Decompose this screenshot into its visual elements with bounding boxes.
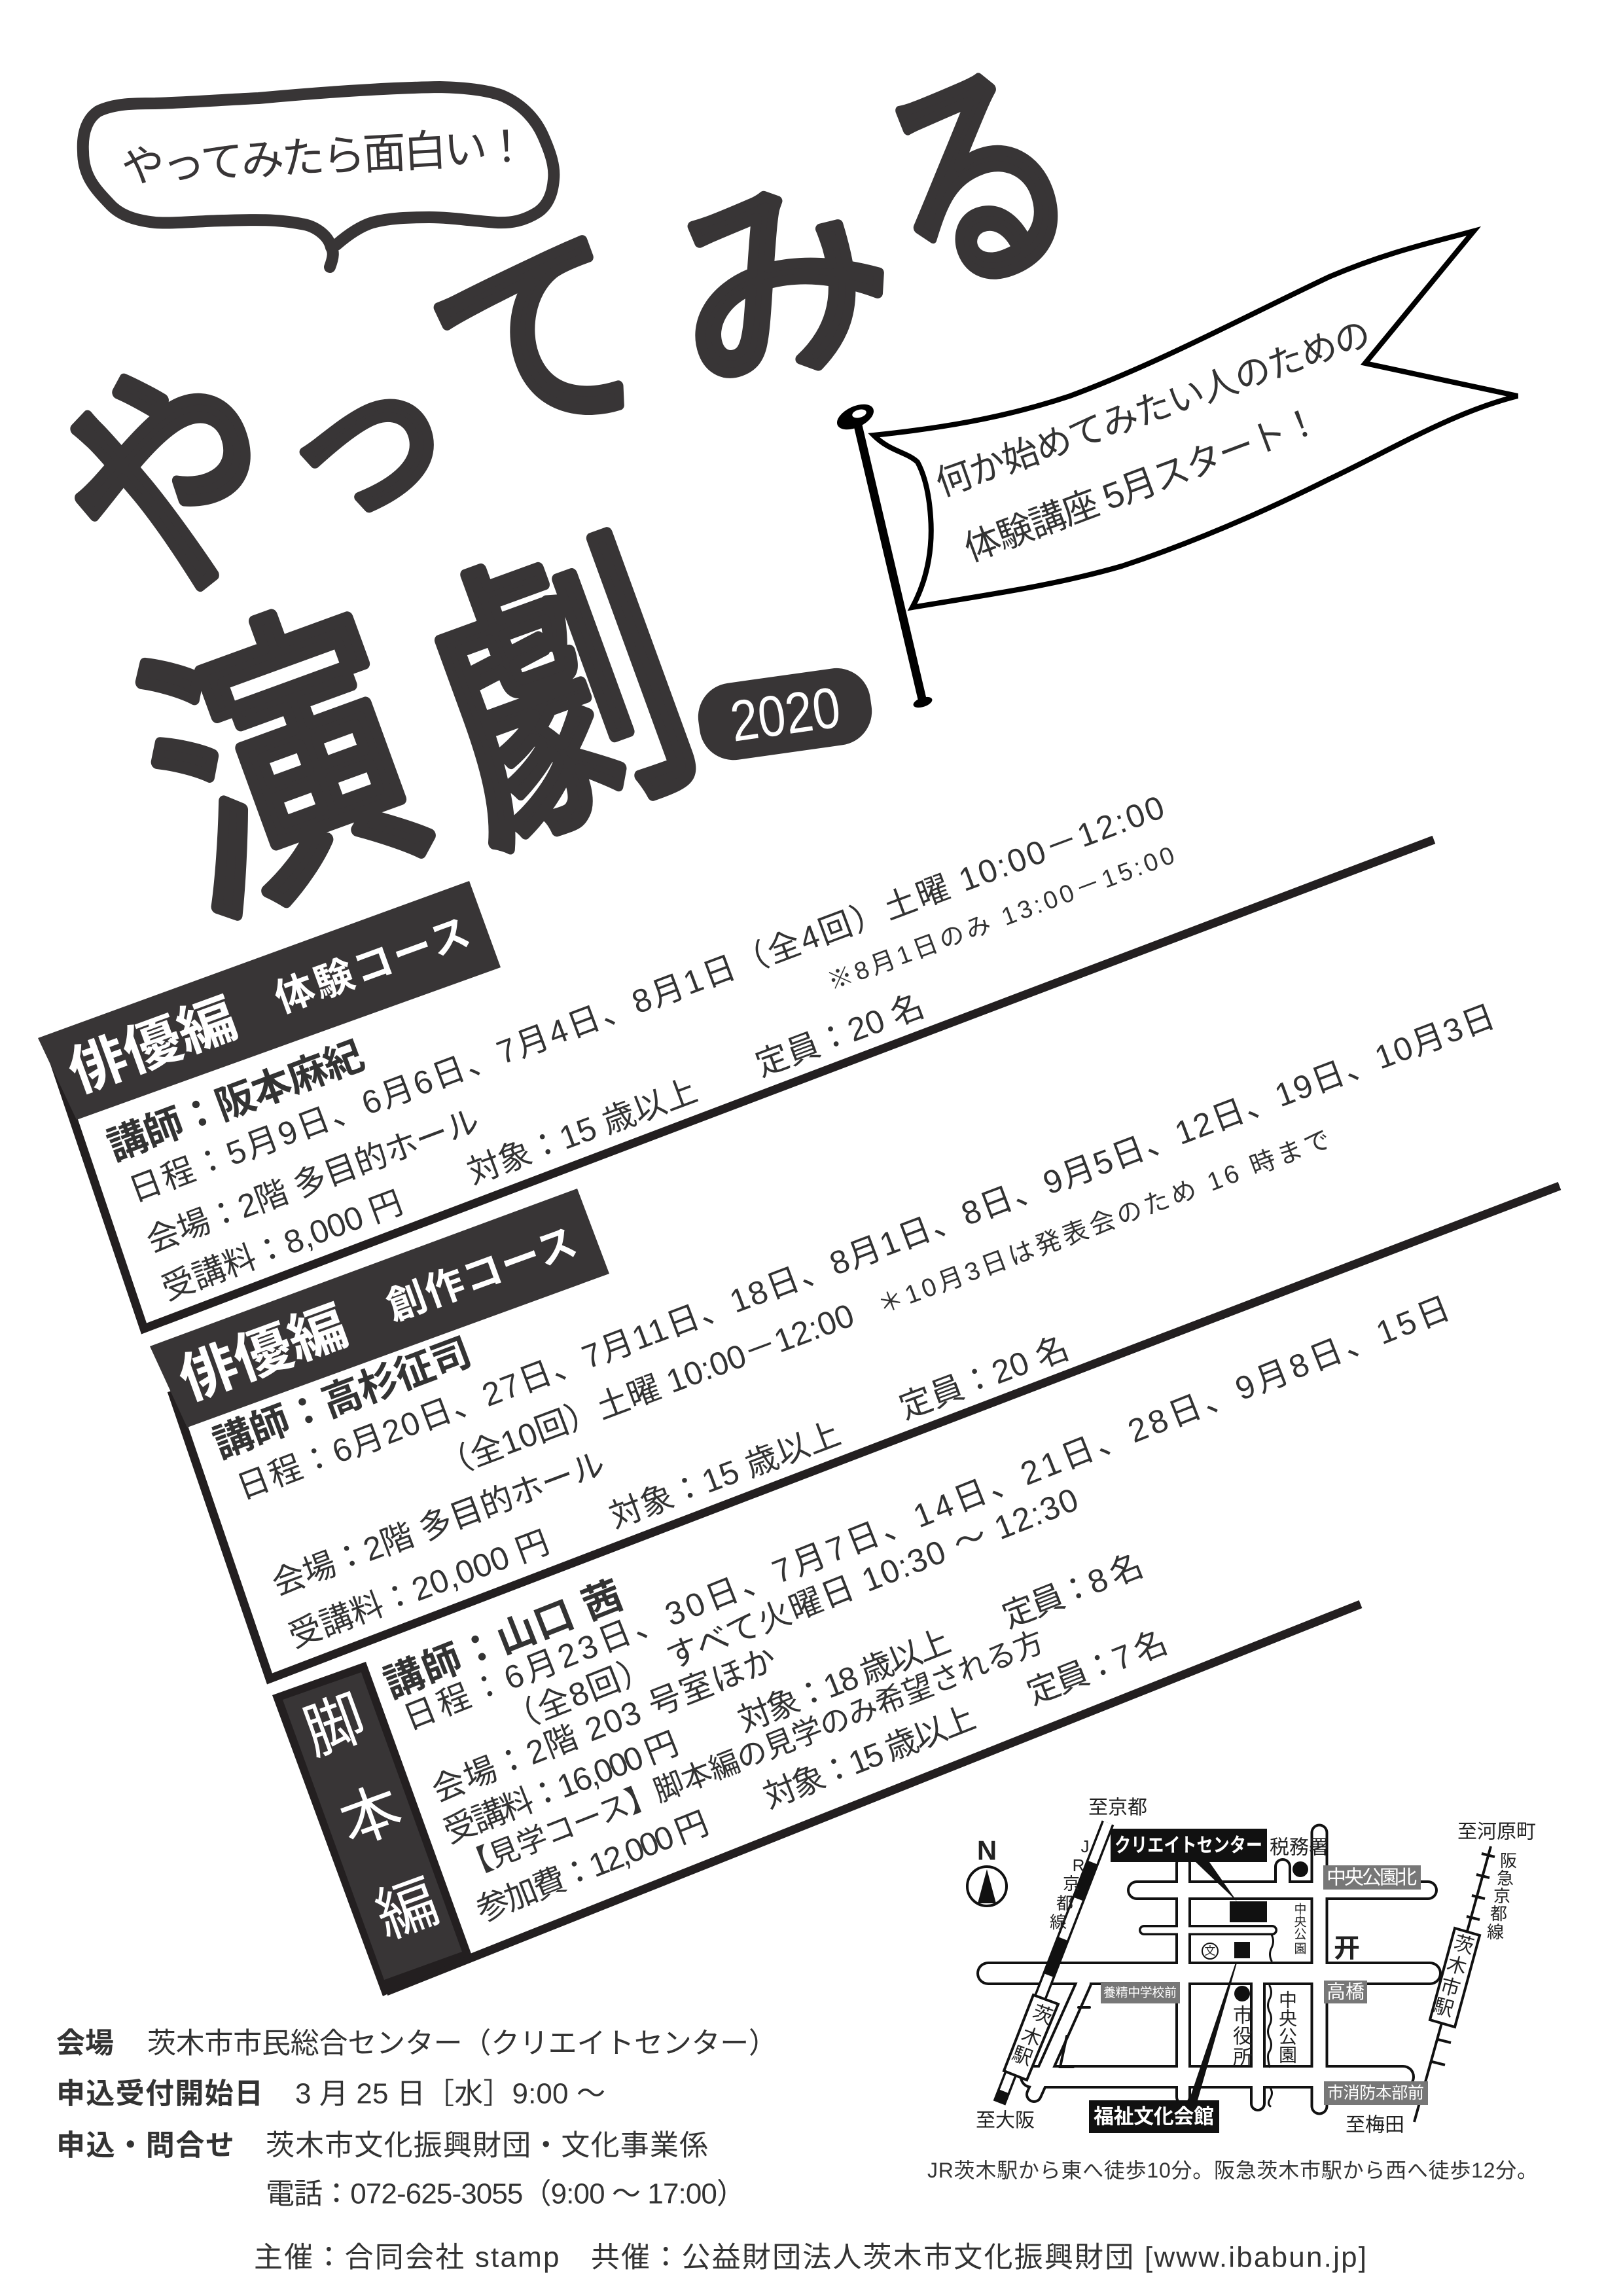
flag pole xyxy=(833,399,933,709)
vertical tab text: 編 xyxy=(367,1867,447,1951)
marker: 市役所 xyxy=(1234,1986,1250,2001)
year badge 2020: 2020 xyxy=(726,674,844,754)
target and capacity: 対象：15 歳以上 定員：20 名 xyxy=(463,987,929,1191)
label: JR京都線: J xyxy=(1081,1837,1089,1856)
label: JR京都線: R xyxy=(1073,1856,1084,1875)
bus stop: 中央公園北: 中央公園北 xyxy=(1327,1867,1417,1889)
speech bubble xyxy=(83,87,554,267)
compass xyxy=(967,1835,1007,1906)
marker: 税務署 xyxy=(1293,1861,1308,1877)
building: クリエイトセンター xyxy=(1230,1901,1267,1922)
Hankyu station box: 駅 xyxy=(1431,1995,1456,2021)
label: 市役所: 市 xyxy=(1233,2005,1253,2026)
flag xyxy=(833,231,1518,709)
vertical tab text: 脚 xyxy=(295,1684,375,1768)
instructor: 講師：高杉征司 xyxy=(207,1330,477,1466)
label: 至梅田: 至梅田 xyxy=(1346,2114,1404,2136)
label: 阪急京都線: 急 xyxy=(1497,1869,1514,1888)
panel frame xyxy=(49,840,1434,1329)
JR station box xyxy=(1004,1995,1058,2080)
observation target: 対象：15 歳以上 定員：7 名 xyxy=(758,1623,1172,1816)
instructor: 講師：山口 茜 xyxy=(378,1573,628,1706)
label: 至京都: 至京都 xyxy=(1088,1797,1147,1818)
JR station box: 駅 xyxy=(1009,2043,1035,2070)
label: 阪急京都線: 阪 xyxy=(1500,1851,1517,1871)
label: 中央公園 small: 中 xyxy=(1294,1902,1307,1916)
panel: 俳優編 体験コース xyxy=(38,789,1434,1329)
schedule line 2: （全8回） すべて火曜日 10:30 ～ 12:30 xyxy=(501,1481,1083,1739)
event information xyxy=(56,2028,777,2210)
label: 市役所: 所 xyxy=(1233,2047,1253,2068)
fee: 受講料：16,000 円 xyxy=(438,1725,683,1850)
vertical tab text xyxy=(295,1684,447,1951)
bus stop: 高橋: 高橋 xyxy=(1327,1981,1364,2003)
label: 中央公園 small xyxy=(1294,1902,1307,1956)
note: ＊10月3日は発表会のため 16 時まで xyxy=(874,1125,1334,1320)
label: JR京都線 xyxy=(1050,1837,1089,1932)
flag text line 2: 体験講座 5月スタート！ xyxy=(959,399,1325,569)
observation fee: 参加費：12,000 円 xyxy=(471,1804,713,1929)
venue: 会場：2階 203 号室ほか xyxy=(427,1640,781,1809)
schedule line 2: （全10回）土曜 10:00－12:00 xyxy=(434,1297,859,1485)
header band xyxy=(38,881,501,1120)
label: 中央公園 large: 公 xyxy=(1279,2026,1297,2047)
title: 演劇: 演 xyxy=(81,497,466,988)
application start date: 3 月 25 日［水］9:00 ～ xyxy=(295,2077,605,2110)
label: JR京都線: 線 xyxy=(1050,1912,1067,1932)
contact label: 申込・問合せ xyxy=(56,2130,234,2161)
label: 至河原町: 至河原町 xyxy=(1457,1821,1536,1843)
label: 中央公園 small: 公 xyxy=(1294,1927,1307,1941)
title: やってみる xyxy=(4,0,1116,675)
school symbol xyxy=(1202,1943,1218,1959)
target and capacity: 対象：15 歳以上 定員：20 名 xyxy=(604,1329,1074,1535)
shrine symbol: 开 xyxy=(1334,1934,1360,1963)
Hankyu line xyxy=(1414,1846,1495,2122)
target and capacity: 対象：18 歳以上 定員：8 名 xyxy=(733,1547,1148,1739)
label: 中央公園 large: 園 xyxy=(1279,2045,1297,2066)
instructor: 講師：阪本麻紀 xyxy=(101,1033,370,1169)
header title: 俳優編 xyxy=(60,987,245,1103)
label: 中央公園 large: 央 xyxy=(1279,2008,1297,2029)
header title: 俳優編 xyxy=(171,1295,355,1411)
panel frame xyxy=(386,1604,1361,1992)
header band xyxy=(150,1189,609,1427)
compass: N xyxy=(977,1835,997,1865)
JR station box: 茨 xyxy=(1029,2001,1056,2029)
Hankyu station box: 市 xyxy=(1438,1975,1463,2001)
bus stop: 養精中学校前 xyxy=(1101,1982,1180,2003)
title: やってみる: み xyxy=(615,81,929,454)
vertical tab xyxy=(272,1662,471,1996)
title: やってみる: や xyxy=(4,257,323,675)
panel frame xyxy=(171,1186,1560,1679)
title: やってみる: っ xyxy=(232,275,486,576)
observation course: 【見学コース】脚本編の見学のみ希望される方 xyxy=(457,1624,1048,1884)
fee: 受講料：8,000 円 xyxy=(156,1184,408,1307)
label: 阪急京都線: 線 xyxy=(1487,1922,1504,1942)
Hankyu station box: 木 xyxy=(1444,1953,1469,1979)
vertical tab text: 本 xyxy=(331,1774,411,1858)
header course: 体験コース xyxy=(269,910,476,1021)
label: JR京都線: 都 xyxy=(1056,1893,1073,1913)
venue: 会場：2階 多目的ホール xyxy=(141,1102,484,1259)
JR line xyxy=(999,1823,1108,2103)
label: 税務署: 税務署 xyxy=(1270,1837,1329,1859)
Hankyu station box: 茨 xyxy=(1452,1932,1476,1958)
schedule: 日程：5月9日、6月6日、7月4日、8月1日（全4回）土曜 10:00－12:00 xyxy=(124,789,1169,1209)
label: 中央公園 small: 央 xyxy=(1294,1915,1307,1929)
callout: クリエイトセンター xyxy=(1111,1829,1267,1901)
flag banner xyxy=(874,231,1518,607)
label: 至大阪: 至大阪 xyxy=(976,2110,1035,2131)
label: JR京都線: 京 xyxy=(1063,1874,1080,1893)
year badge 2020 xyxy=(694,664,876,764)
bus stop: 養精中学校前: 養精中学校前 xyxy=(1103,1986,1177,2000)
bus stop: 市消防本部前: 市消防本部前 xyxy=(1327,2084,1424,2102)
label: 阪急京都線: 都 xyxy=(1490,1904,1507,1924)
schedule: 日程：6月20日、27日、7月11日、18日、8月1日、8日、9月5日、12日、19日、10月3日 xyxy=(232,997,1500,1507)
label: 中央公園 large: 中 xyxy=(1279,1990,1297,2011)
bubble text: やってみたら面白い！ xyxy=(120,122,529,191)
panel: 脚本編 xyxy=(272,1289,1455,1996)
access map xyxy=(927,1797,1538,2182)
JR station box: 木 xyxy=(1018,2024,1044,2051)
flag text line 1: 何か始めてみたい人のための xyxy=(931,313,1376,504)
map roads xyxy=(988,1833,1430,2106)
contact phone: 電話：072-625-3055（9:00 ～ 17:00） xyxy=(266,2178,745,2210)
application start label: 申込受付開始日 xyxy=(56,2077,263,2110)
venue label: 会場 xyxy=(56,2028,114,2059)
header course: 創作コース xyxy=(381,1220,582,1329)
panel: 俳優編 創作コース xyxy=(150,997,1560,1679)
title: やってみる: て xyxy=(385,143,681,511)
organisers: 主催：合同会社 stamp 共催：公益財団法人茨木市文化振興財団 [www.ibabun.jp] xyxy=(254,2241,1366,2274)
callout: クリエイトセンター: クリエイトセンター xyxy=(1115,1835,1262,1856)
title: 演劇 xyxy=(81,429,738,988)
note: ※8月1日のみ 13:00－15:00 xyxy=(824,842,1179,996)
label: 阪急京都線 xyxy=(1487,1851,1517,1942)
label: 市役所 xyxy=(1233,2005,1253,2068)
label: 中央公園 small: 園 xyxy=(1294,1943,1307,1956)
venue name: 茨木市市民総合センター（クリエイトセンター） xyxy=(147,2028,777,2059)
label: 市役所: 役 xyxy=(1233,2026,1253,2047)
access note: JR茨木駅から東へ徒歩10分。阪急茨木市駅から西へ徒歩12分。 xyxy=(927,2159,1538,2182)
callout: 福祉文化会館: 福祉文化会館 xyxy=(1094,2105,1214,2128)
school symbol: 文 xyxy=(1204,1945,1216,1957)
callout: 福祉文化会館 xyxy=(1089,1963,1237,2133)
contact organisation: 茨木市文化振興財団・文化事業係 xyxy=(266,2130,708,2161)
venue: 会場：2階 多目的ホール xyxy=(267,1445,610,1602)
title: 演劇: 劇 xyxy=(365,429,738,913)
fee: 受講料：20,000 円 xyxy=(284,1524,554,1655)
building: 福祉文化会館 xyxy=(1234,1942,1250,1958)
Hankyu station box xyxy=(1430,1928,1480,2027)
label: 阪急京都線: 京 xyxy=(1493,1886,1510,1906)
schedule: 日程：6月23日、30日、7月7日、14日、21日、28日、9月8日、15日 xyxy=(398,1289,1455,1737)
label: 中央公園 large xyxy=(1279,1990,1297,2066)
